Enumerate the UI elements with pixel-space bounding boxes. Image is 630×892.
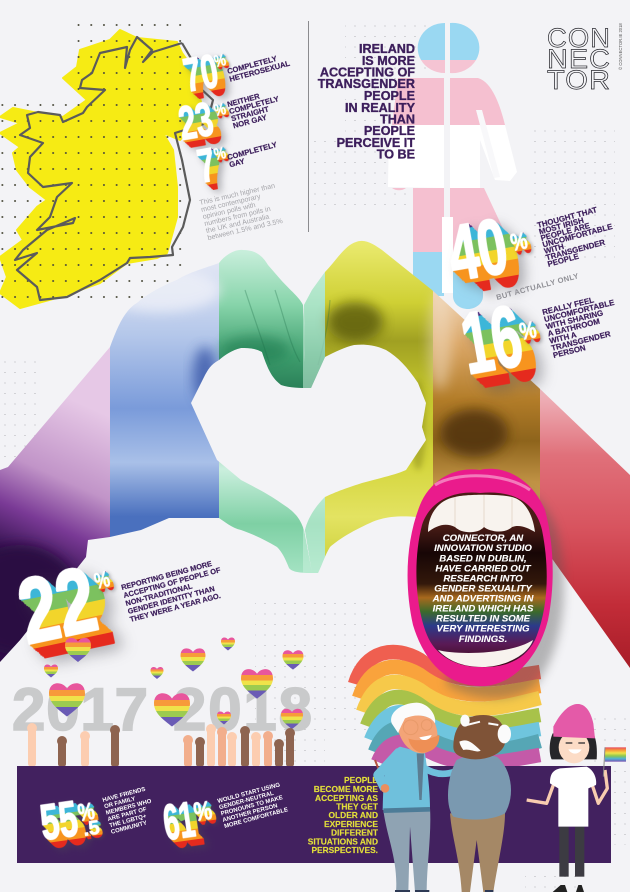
mouth text: FINDINGS. [459, 634, 507, 645]
stat 40 percent: PEOPLE [547, 252, 580, 269]
mouth text: RESULTED IN SOME [436, 614, 531, 624]
stat 55.5 percent: OR FAMILY [104, 796, 136, 810]
illustration: people [375, 703, 626, 892]
mouth text: VERY INTERESTING [437, 624, 530, 634]
yellow callout text: PEOPLE [344, 775, 378, 785]
stat 23 percent: % [212, 99, 227, 120]
stat 55.5 percent: THE LGBTQ+ [109, 814, 148, 829]
older man with beard [395, 715, 511, 892]
figure torso and arms [388, 78, 517, 190]
mouth text: HAVE CARRIED OUT [435, 564, 532, 574]
stat 61 percent: ANOTHER PERSON [222, 803, 278, 824]
map dots [0, 20, 185, 300]
heading: Ireland is more accepting: THAN [380, 112, 415, 126]
logo: Connector: CON [547, 23, 611, 53]
stat 23 percent [175, 87, 284, 150]
mouth text: IRELAND WHICH HAS [433, 604, 534, 614]
stat 22 percent: ACCEPTING OF PEOPLE OF [122, 565, 222, 600]
stat 70 percent: % [212, 50, 227, 71]
note: higher than polls: opinion polls with [202, 201, 256, 221]
mouth callout [408, 469, 564, 698]
mouth text: CONNECTOR, AN [443, 533, 524, 544]
vertical divider line [308, 21, 309, 232]
stat 70 percent: 70 [180, 44, 222, 102]
stat 22 percent [10, 548, 228, 664]
stat 55.5 percent: HAVE FRIENDS [102, 787, 146, 804]
stat 16 percent: % [517, 316, 539, 346]
mouth text: RESEARCH INTO [443, 574, 523, 584]
stat 22 percent: 22 [10, 548, 105, 664]
stat 22 percent: REPORTING BEING MORE [120, 559, 213, 592]
heading: Ireland is more accepting [318, 42, 416, 162]
stat 55.5 percent [37, 786, 158, 851]
stat 61 percent: MORE COMFORTABLE [224, 807, 289, 830]
stat 55.5 percent: MEMBERS WHO [105, 799, 153, 817]
stat 16 percent: UNCOMFORTABLE [543, 298, 615, 324]
stat 22 percent: % [92, 566, 112, 594]
heading: Ireland is more accepting: PEOPLE [364, 124, 415, 138]
stat 23 percent: 23 [175, 92, 217, 150]
yellow callout text: PERSPECTIVES. [311, 845, 378, 855]
year labels: 2017 [12, 676, 148, 743]
logo: Connector: TOR [547, 65, 611, 95]
note: higher than polls: most contemporary [200, 192, 262, 214]
logo: Connector [547, 23, 623, 95]
mouth text: INNOVATION STUDIO [434, 543, 532, 554]
stat 16 percent: WITH SHARING [545, 308, 604, 331]
stat 7 percent [194, 138, 280, 193]
year labels [12, 676, 312, 743]
stat 16 percent: REALLY FEEL [541, 295, 595, 317]
upper teeth [428, 495, 535, 532]
stat 16 percent: WITH A [548, 330, 578, 346]
text: but actually only: BUT ACTUALLY ONLY [495, 271, 580, 302]
stat 16 percent: PERSON [552, 343, 587, 360]
stat 61 percent: GENDER-NEUTRAL [219, 791, 275, 811]
figure legs [413, 188, 506, 309]
heading: Ireland is more accepting: PERCEIVE IT [337, 136, 415, 150]
mouth shadow [446, 483, 564, 698]
mouth text: GENDER SEXUALITY [434, 584, 533, 594]
rainbow flag [355, 652, 540, 763]
yellow callout text: EXPERIENCE [324, 819, 378, 829]
heading: Ireland is more accepting: ACCEPTING OF [320, 66, 415, 80]
stat 7 percent: GAY [228, 156, 246, 169]
stat 40 percent: UNCOMFORTABLE [541, 222, 613, 249]
young woman with hat [527, 704, 626, 892]
note: higher than polls: numbers from polls in [204, 205, 271, 228]
lips [408, 469, 553, 686]
note: higher than polls [199, 182, 284, 242]
mouth text: AND ADVERTISING IN [432, 594, 534, 604]
stat 16 percent [455, 288, 624, 393]
stat 23 percent: NOR GAY [232, 113, 268, 130]
yellow callout text: BECOME MORE [314, 784, 378, 794]
yellow callout text: THEY GET [336, 802, 379, 812]
hands heart in rainbow bands [0, 240, 630, 670]
heading: Ireland is more accepting: IS MORE [362, 54, 415, 68]
stat 7 percent: COMPLETELY [226, 140, 278, 162]
stat 61 percent: PRONOUNS TO MAKE [220, 795, 284, 817]
stat 55.5 percent: ARE PART OF [107, 807, 148, 823]
stat 55.5 percent: 55 [37, 790, 81, 851]
stat 7 percent: 7 [194, 138, 219, 193]
yellow callout text: DIFFERENT [331, 828, 379, 838]
stat 70 percent: COMPLETELY [226, 54, 278, 76]
stat 55.5 percent: .5 [82, 817, 101, 841]
stat 7 percent: % [212, 143, 227, 164]
mouth text: BASED IN DUBLIN, [439, 554, 527, 564]
stat 40 percent: PEOPLE ARE [540, 221, 591, 243]
map of Ireland [0, 20, 213, 308]
stat 16 percent: TRANSGENDER [550, 329, 612, 353]
note: higher than polls: between 1.5% and 3.5% [207, 217, 284, 242]
rainbow hearts [44, 637, 304, 729]
heading: Ireland is more accepting: TRANSGENDER [318, 77, 415, 91]
note: higher than polls: This is much higher than [199, 182, 276, 207]
stat 40 percent: % [508, 227, 530, 257]
stat 55.5 percent: COMMUNITY [111, 820, 148, 836]
map grey outline [15, 37, 213, 300]
raised arms [27, 723, 295, 767]
purple band panel [17, 766, 611, 863]
map yellow land [0, 30, 203, 308]
logo: Connector: NEC [547, 44, 611, 74]
stat 70 percent [180, 44, 291, 102]
older man with glasses [378, 703, 455, 892]
heading: Ireland is more accepting: IRELAND [359, 42, 415, 56]
stat 23 percent: COMPLETELY [228, 94, 280, 116]
figure head [418, 23, 479, 73]
stat 40 percent: MOST IRISH [538, 216, 585, 236]
stat 40 percent [442, 201, 619, 298]
stat 70 percent: HETEROSEXUAL [228, 59, 291, 84]
stat 40 percent: THOUGHT THAT [536, 205, 598, 230]
stat 16 percent: 16 [455, 288, 529, 393]
stat 40 percent: WITH [543, 242, 565, 256]
yellow callout text [308, 775, 379, 855]
heading: Ireland is more accepting: PEOPLE [364, 89, 415, 103]
flag pole [375, 760, 387, 790]
yellow callout text: ACCEPTING AS [315, 793, 378, 803]
year labels: 2018 [173, 676, 312, 743]
stat 61 percent: % [192, 795, 214, 827]
mouth interior [416, 492, 547, 667]
stat 22 percent: NON-TRADITIONAL [124, 581, 194, 608]
stat 23 percent: STRAIGHT [230, 104, 270, 123]
heading: Ireland is more accepting: IN REALITY [345, 101, 416, 115]
stat 23 percent: NEITHER [226, 91, 261, 109]
yellow callout text: SITUATIONS AND [308, 836, 378, 846]
stat 61 percent: WOULD START USING [217, 782, 281, 805]
note: higher than polls: the UK and Australia [205, 213, 270, 235]
stat 61 percent: 61 [160, 791, 198, 851]
yellow callout text: OLDER AND [329, 810, 378, 820]
stat 61 percent [160, 782, 289, 851]
icon: transgender flag person figure [388, 23, 517, 309]
stat 55.5 percent: % [76, 798, 96, 827]
stat 40 percent: 40 [442, 201, 514, 298]
stat 40 percent: TRANSGENDER [545, 238, 606, 262]
stat 22 percent: THEY WERE A YEAR AGO. [129, 591, 222, 624]
stat 16 percent: A BATHROOM [547, 317, 601, 338]
lower teeth [438, 640, 533, 667]
heading: Ireland is more accepting: TO BE [377, 148, 415, 162]
mouth text [432, 533, 534, 645]
stat 22 percent: GENDER IDENTITY THAN [127, 584, 216, 616]
logo: Connector: © CONNECTOR.IE 2018 [618, 23, 623, 70]
